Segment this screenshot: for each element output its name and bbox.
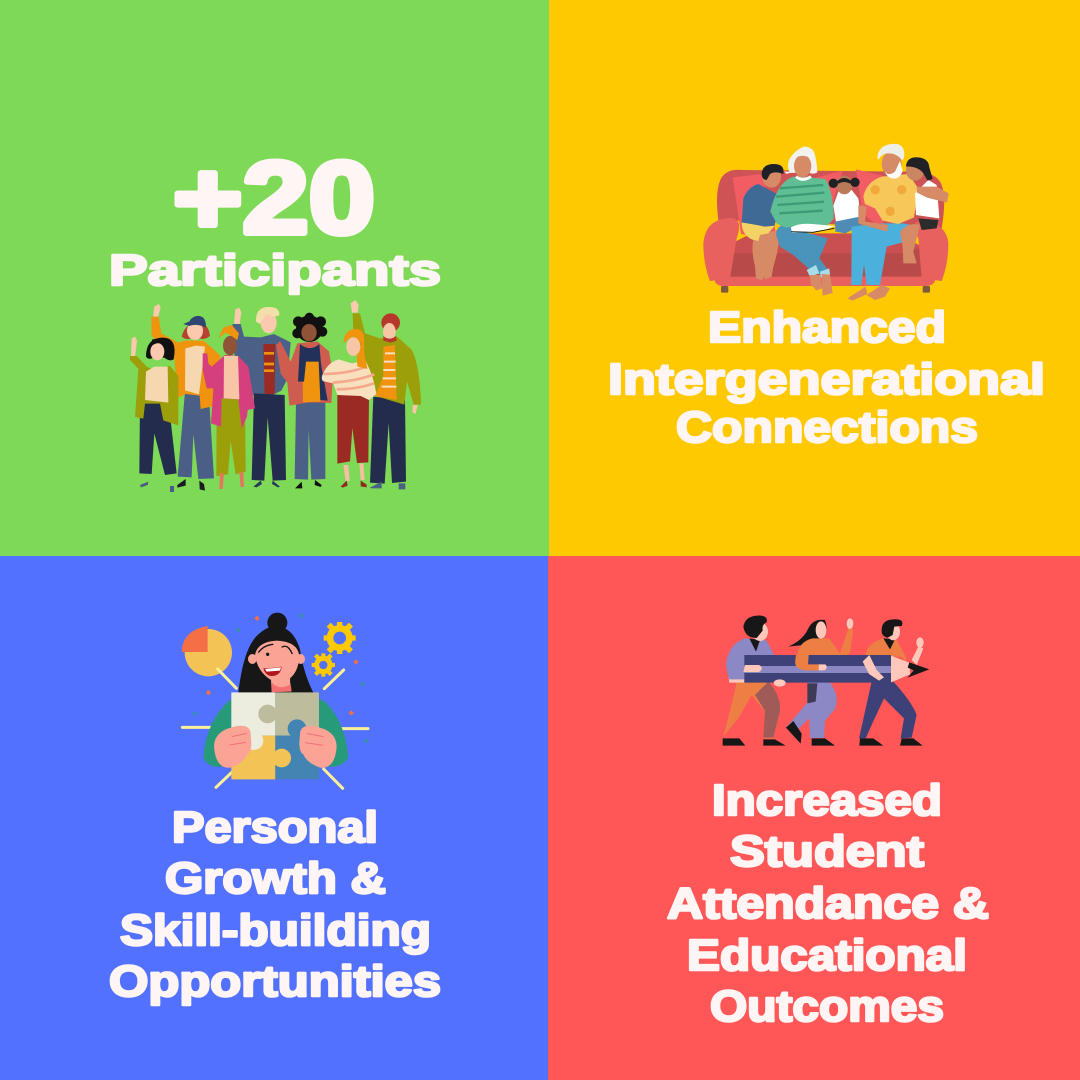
heading: +20: +20 (173, 141, 375, 255)
heading: Personal Growth & Skill-building Opportunities (109, 803, 441, 1006)
grandmother in green sweater (770, 147, 835, 296)
girl with ponytail on grandfather's lap (900, 157, 949, 263)
person: blond man in blue hoodie (230, 307, 291, 487)
heading: Increased Student Attendance & Educational Outcomes: Increased (712, 776, 942, 825)
panel: student attendance (548, 556, 1080, 1080)
illustration: family on a red sofa (703, 144, 949, 301)
gear icons (312, 622, 356, 677)
heading: Enhanced Intergenerational Connections (608, 303, 1045, 452)
heading: Participants: Participants (109, 246, 441, 295)
heading: Increased Student Attendance & Educational Outcomes: Attendance & (667, 879, 989, 928)
heading: Enhanced Intergenerational Connections: Intergenerational (608, 355, 1045, 404)
illustration: group of seven people waving (130, 300, 421, 492)
grandfather in yellow shirt (847, 144, 918, 301)
little girl in white (829, 176, 862, 233)
boy in blue shirt (742, 164, 784, 281)
heading: Personal Growth & Skill-building Opportunities: Skill-building (120, 906, 431, 955)
person: carrier left (722, 616, 786, 746)
heading: Personal Growth & Skill-building Opportunities: Personal (172, 803, 378, 852)
sparkle dots (193, 614, 369, 743)
person: man in cap and orange jacket (151, 304, 221, 491)
giant pencil (744, 655, 929, 687)
panel: personal growth (0, 556, 548, 1080)
heading: Enhanced Intergenerational Connections: Enhanced (708, 303, 946, 352)
illustration: woman holding puzzle (182, 613, 369, 788)
heading: Increased Student Attendance & Educational Outcomes: Educational (687, 931, 967, 980)
woman (203, 613, 348, 767)
person: woman with afro and scarf (276, 313, 333, 488)
heading: Personal Growth & Skill-building Opportunities: Opportunities (109, 957, 441, 1006)
person: woman in striped sweater (322, 329, 376, 488)
heading: Increased Student Attendance & Educational Outcomes (667, 776, 989, 1031)
sofa (703, 169, 948, 293)
heading: Increased Student Attendance & Educational Outcomes: Outcomes (710, 982, 944, 1031)
puzzle (231, 692, 319, 779)
person: carrier right, body (859, 619, 924, 746)
panel: intergenerational connections (549, 0, 1080, 557)
hands (214, 726, 337, 768)
person: carrier middle (786, 618, 853, 746)
pie chart icon (182, 626, 232, 676)
illustration: three people carrying a giant pencil (722, 616, 929, 746)
heading: Enhanced Intergenerational Connections: Connections (676, 403, 978, 452)
person: woman with glasses (130, 337, 178, 492)
radiating lines (182, 669, 368, 788)
carriers' arms over the pencil (726, 655, 884, 681)
panel: participants (0, 0, 549, 557)
person: bearded man with olive jacket (351, 300, 421, 489)
heading: Personal Growth & Skill-building Opportunities: Growth & (165, 854, 386, 903)
person: woman in pink cardigan (203, 325, 255, 489)
heading: Increased Student Attendance & Educational Outcomes: Student (730, 827, 924, 876)
